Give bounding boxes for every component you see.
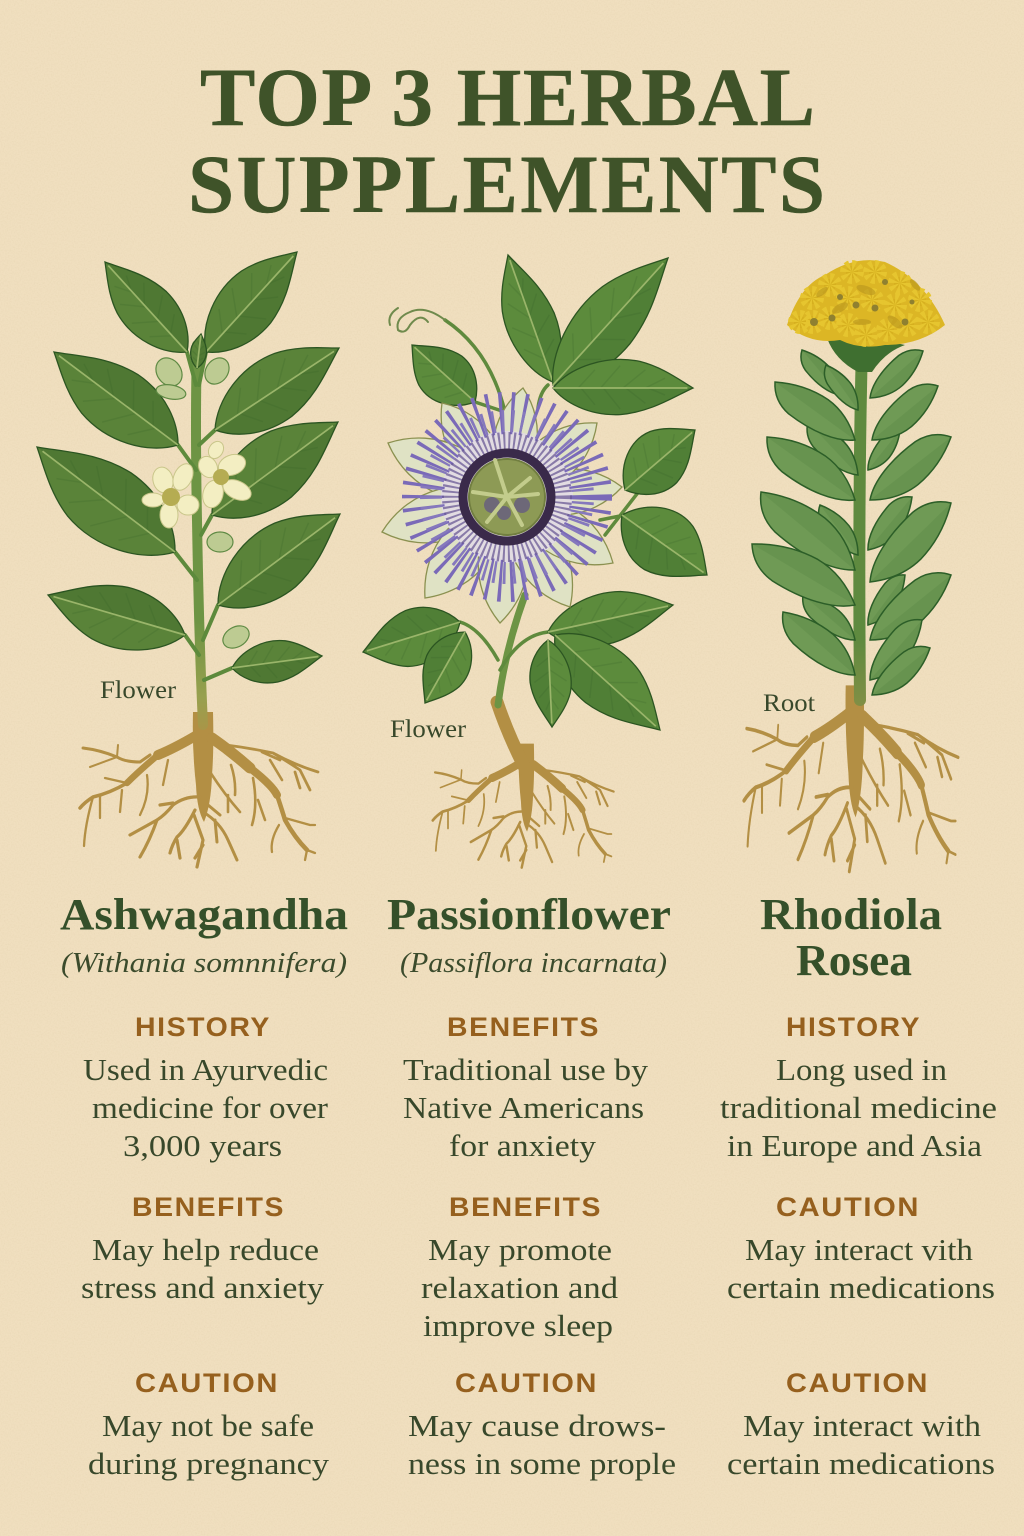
ashwagandha flowers: [142, 439, 254, 528]
title: [188, 51, 825, 230]
passionflower roots: [433, 744, 614, 868]
history block: HISTORY: [786, 1012, 921, 1042]
passionflower leaves: [355, 237, 727, 752]
history block: 3,000 years: [123, 1128, 282, 1163]
benefits block two: BENEFITS: [449, 1192, 602, 1222]
history block: [720, 1012, 997, 1163]
benefits block two: [421, 1192, 619, 1343]
plant name: Rosea: [796, 936, 912, 985]
title: SUPPLEMENTS: [188, 138, 825, 230]
benefits block: BENEFITS: [132, 1192, 285, 1222]
rhodiola leaves: [741, 341, 964, 705]
history block: [83, 1012, 329, 1163]
benefits block two: May promote: [428, 1232, 612, 1267]
benefits block two: improve sleep: [423, 1308, 613, 1343]
caution block two: CAUTION: [786, 1368, 929, 1398]
caution block: during pregnancy: [88, 1446, 330, 1481]
rhodiola sepals: [827, 336, 905, 372]
benefits block one: [403, 1012, 649, 1163]
caution block one: [727, 1192, 995, 1305]
caution block: CAUTION: [455, 1368, 598, 1398]
caution block: May not be safe: [102, 1408, 314, 1443]
history block: in Europe and Asia: [727, 1128, 982, 1163]
rhodiola roots: [744, 685, 958, 871]
column: passionflower text: [387, 890, 676, 1481]
passionflower bloom: [375, 385, 626, 624]
plant name: [760, 890, 942, 985]
caution block: CAUTION: [135, 1368, 279, 1398]
caution block two: May interact with: [743, 1408, 982, 1443]
panel: passionflower illustration: [355, 237, 727, 868]
caution block: ness in some prople: [408, 1446, 676, 1481]
label: flower: Flower: [390, 716, 467, 743]
ashwagandha leaves: [13, 232, 359, 688]
benefits block one: Traditional use by: [403, 1052, 649, 1087]
ashwagandha buds: [151, 353, 253, 653]
label: flower: Flower: [100, 677, 177, 704]
history block: Used in Ayurvedic: [83, 1052, 328, 1087]
panel: ashwagandha illustration: [13, 232, 359, 867]
passionflower stem and tendril: [389, 308, 640, 770]
panel: rhodiola illustration: [741, 260, 964, 871]
plant name: Passionflower: [387, 890, 671, 939]
scientific name: (Passiflora incarnata): [400, 947, 667, 979]
title: TOP 3 HERBAL: [200, 51, 815, 143]
petals: [375, 385, 626, 624]
column: ashwagandha text: [60, 890, 348, 1481]
scientific name: (Withania somnnifera): [61, 947, 347, 979]
caution block: [88, 1368, 330, 1481]
benefits block one: Native Americans: [403, 1090, 644, 1125]
caution block two: certain medications: [727, 1446, 995, 1481]
caution block: May cause drows-: [408, 1408, 666, 1443]
column: rhodiola text: [720, 890, 997, 1481]
history block: medicine for over: [92, 1090, 329, 1125]
ashwagandha roots: [80, 712, 318, 867]
benefits block two: relaxation and: [421, 1270, 619, 1305]
plant name: Rhodiola: [760, 890, 942, 939]
corona filaments: [423, 413, 591, 581]
benefits block one: for anxiety: [449, 1128, 597, 1163]
caution block two: [727, 1368, 995, 1481]
caution block one: certain medications: [727, 1270, 995, 1305]
corona centre: [469, 459, 545, 535]
benefits block: [81, 1192, 325, 1305]
benefits block: stress and anxiety: [81, 1270, 325, 1305]
benefits block one: BENEFITS: [447, 1012, 600, 1042]
caution block one: CAUTION: [776, 1192, 920, 1222]
rhodiola stem: [859, 345, 862, 700]
rhodiola flower head: [787, 260, 945, 347]
label: root: Root: [763, 690, 815, 717]
caution block: [408, 1368, 676, 1481]
history block: Long used in: [776, 1052, 948, 1087]
caution block one: May interact vith: [745, 1232, 974, 1267]
history block: HISTORY: [135, 1012, 271, 1042]
history block: traditional medicine: [720, 1090, 997, 1125]
ashwagandha stem: [175, 345, 232, 725]
benefits block: May help reduce: [92, 1232, 319, 1267]
plant name: Ashwagandha: [60, 890, 348, 939]
